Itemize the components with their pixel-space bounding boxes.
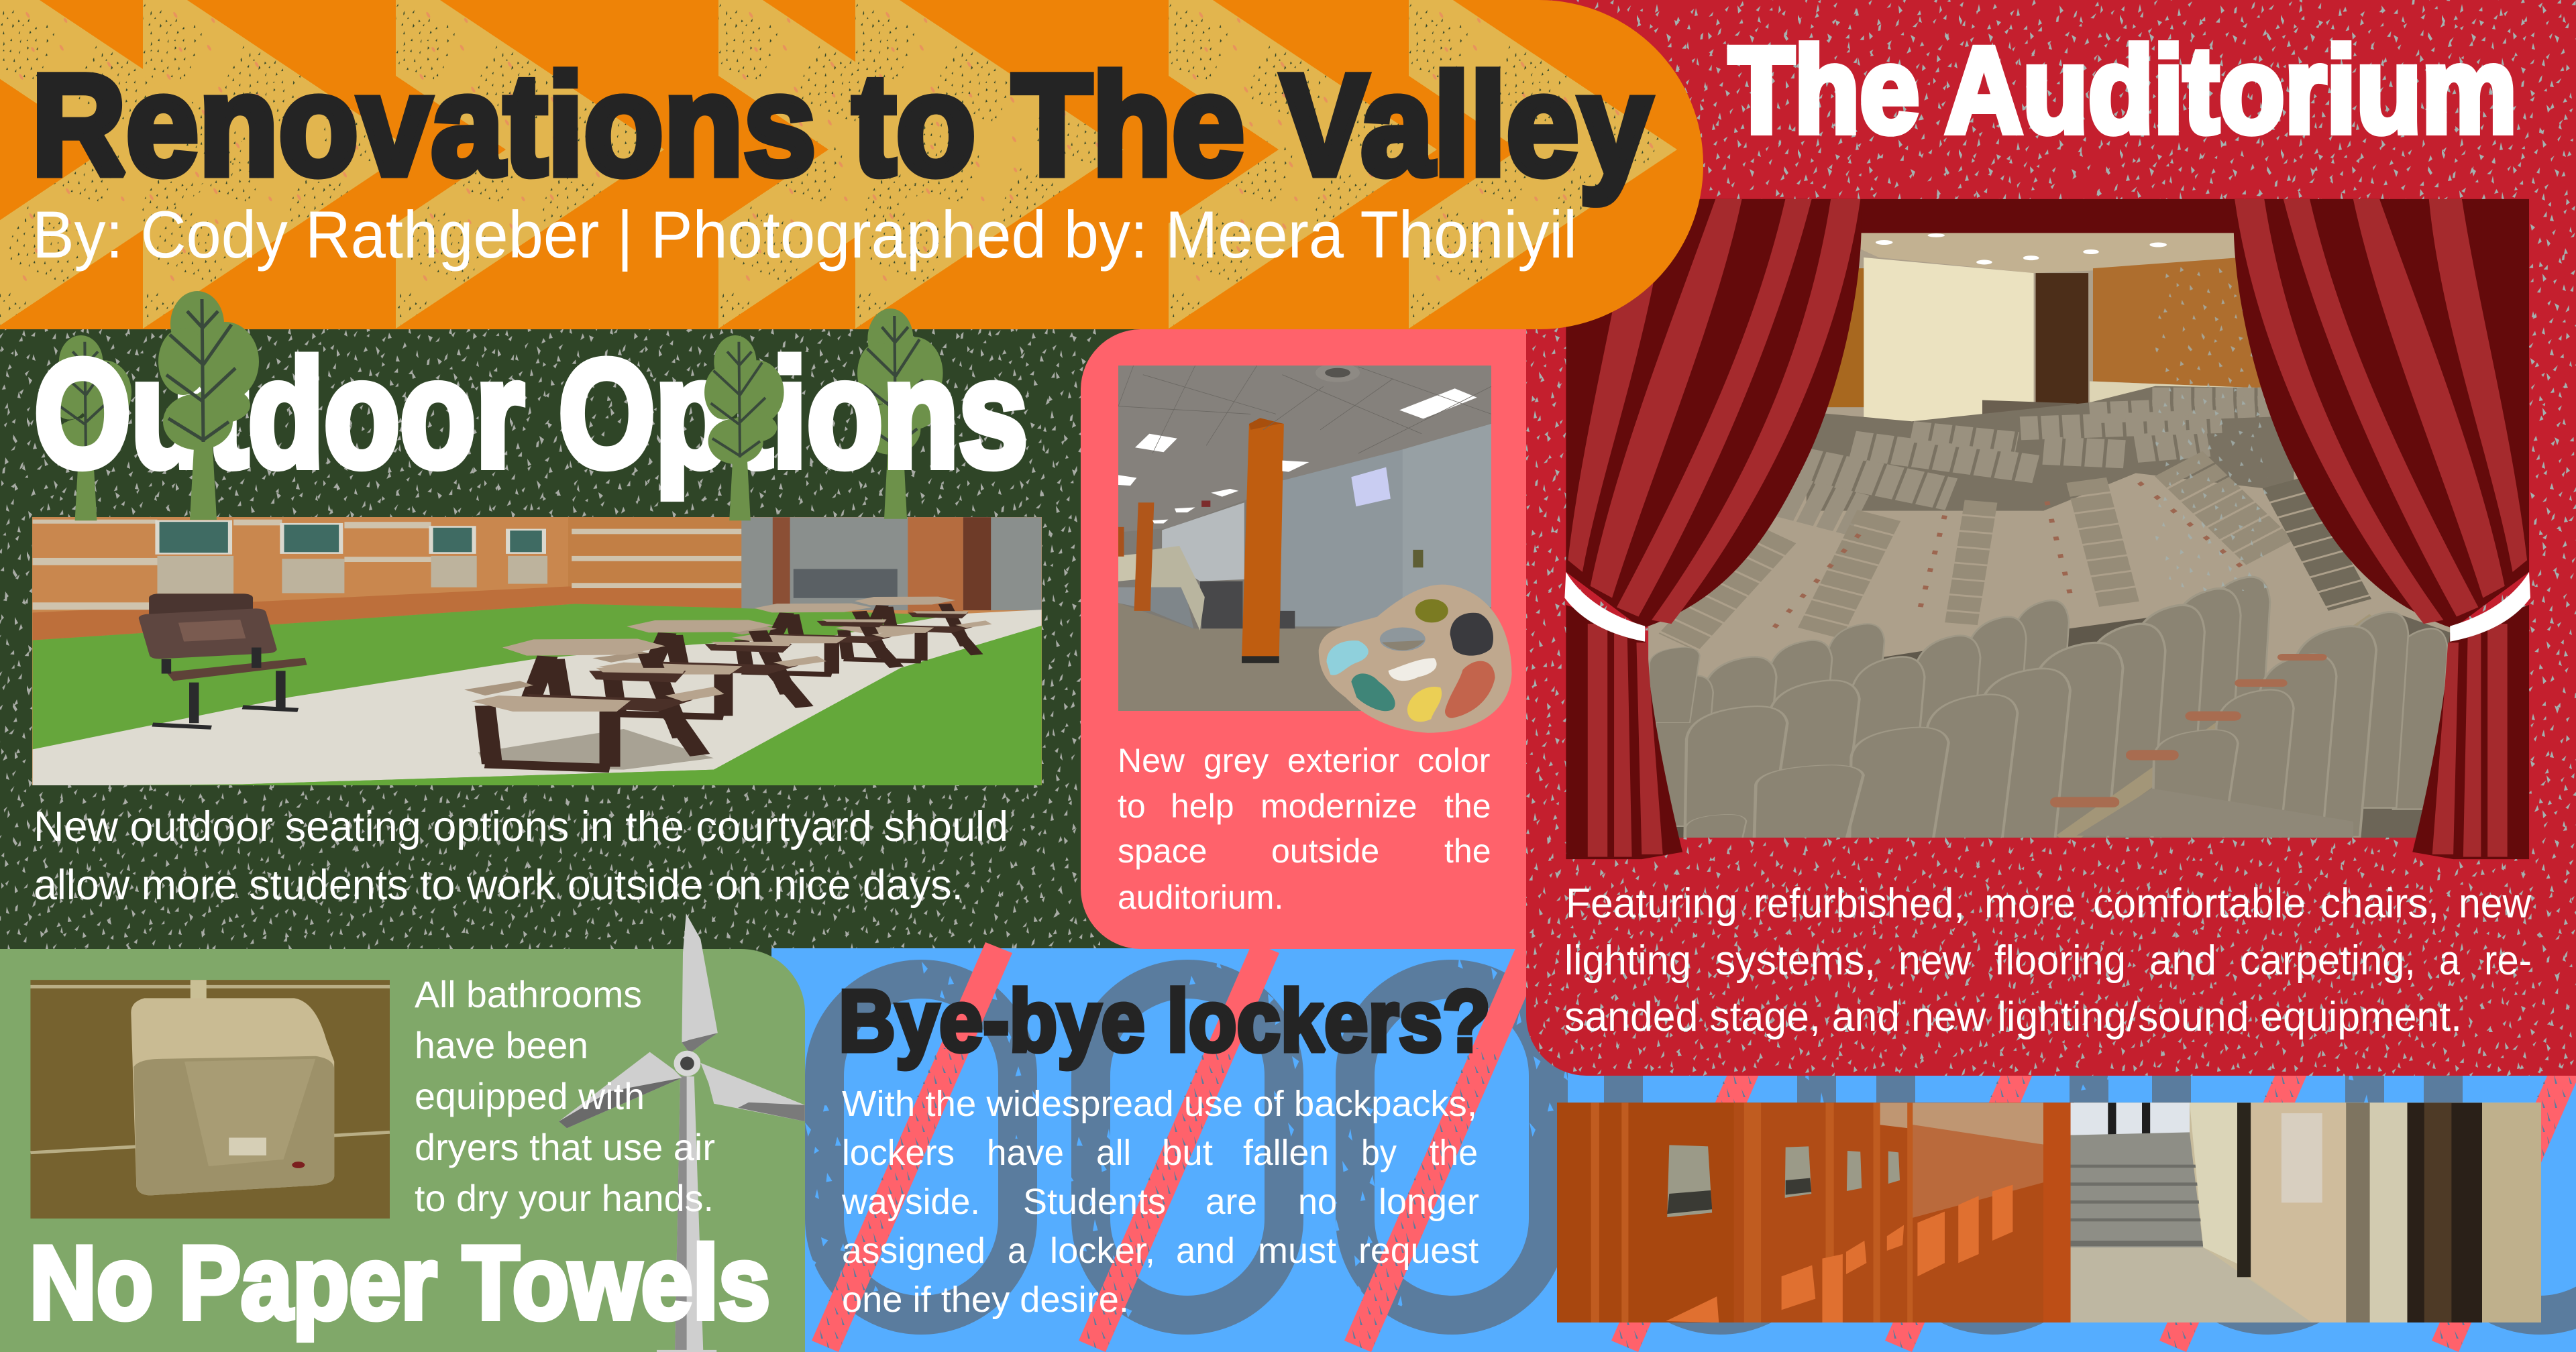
photo: renovated auditorium seats bbox=[1648, 231, 2465, 875]
heading: Bye-bye lockers?: Bye-bye lockers? bbox=[839, 972, 1491, 1070]
text: grey exterior description: the bbox=[1444, 832, 1491, 870]
text: lockers description: With the widespread use of backpacks, bbox=[842, 1084, 1477, 1124]
text: lockers description: the bbox=[1430, 1133, 1478, 1173]
text: auditorium description: chairs, bbox=[2320, 881, 2439, 927]
icon: back tree right bbox=[857, 308, 943, 519]
text: auditorium description: systems, bbox=[1715, 938, 1876, 984]
panel: coral corridor background bbox=[1081, 329, 1527, 949]
text: auditorium description: re- bbox=[2484, 938, 2532, 984]
subtitle: byline: By: Cody Rathgeber | Photographed by: Meera Thoniyil bbox=[32, 197, 1577, 272]
text: auditorium description: Featuring bbox=[1566, 881, 1737, 927]
text: grey exterior description bbox=[1118, 742, 1491, 916]
panel: no paper towels background bbox=[0, 949, 805, 1352]
text: grey exterior description: to bbox=[1118, 787, 1146, 825]
text: auditorium description bbox=[1564, 881, 2532, 1040]
decoration: steel loop shapes bbox=[824, 979, 2576, 1315]
icon: front tree left bbox=[158, 291, 259, 520]
text: grey exterior description: New bbox=[1118, 742, 1185, 779]
text: bathrooms description: equipped with bbox=[415, 1075, 645, 1117]
text: auditorium description: new bbox=[2459, 881, 2531, 927]
text: grey exterior description: the bbox=[1444, 787, 1491, 825]
text: lockers description: lockers bbox=[842, 1133, 955, 1173]
text: auditorium description: refurbished, bbox=[1754, 881, 1965, 927]
text: courtyard description: allow more students to work outside on nice days. bbox=[34, 862, 963, 909]
text: bathrooms description: dryers that use air bbox=[415, 1126, 715, 1168]
text: lockers description: Students bbox=[1023, 1182, 1166, 1222]
text: lockers description: one if they desire. bbox=[842, 1280, 1129, 1320]
icon: back tree left bbox=[49, 335, 131, 520]
title: Renovations to The Valley: Renovations to The Valley bbox=[32, 45, 1652, 205]
text: auditorium description: sanded stage, and new lighting/sound equipment. bbox=[1564, 994, 2462, 1040]
text: auditorium description: flooring bbox=[1994, 938, 2126, 984]
text: lockers description: request bbox=[1358, 1231, 1479, 1271]
text: lockers description bbox=[841, 1084, 1479, 1320]
text: lockers description: are bbox=[1205, 1182, 1257, 1222]
heading: No Paper Towels: No Paper Towels bbox=[30, 1225, 770, 1341]
text: grey exterior description: help bbox=[1171, 787, 1234, 825]
text: auditorium description: and bbox=[2149, 938, 2216, 984]
photo: hand dryer bbox=[30, 980, 390, 1219]
text: lockers description: wayside. bbox=[841, 1182, 980, 1222]
text: grey exterior description: color bbox=[1417, 742, 1490, 779]
icon: stage curtains bbox=[1564, 199, 2530, 859]
heading: Outdoor Options: Outdoor Options bbox=[34, 329, 1028, 499]
text: auditorium description: carpeting, bbox=[2240, 938, 2416, 984]
photo: hallway outside the auditorium bbox=[1118, 363, 1492, 712]
photo: courtyard seating bbox=[28, 514, 1053, 790]
text: lockers description: by bbox=[1361, 1133, 1397, 1173]
text: courtyard description: New outdoor seating options in the courtyard should bbox=[34, 803, 1008, 850]
text: grey exterior description: exterior bbox=[1287, 742, 1399, 779]
text: bathrooms description: to dry your hands. bbox=[415, 1177, 714, 1219]
photo: lockers hallway bbox=[1550, 1101, 2550, 1325]
text: grey exterior description: space bbox=[1118, 832, 1207, 870]
text: grey exterior description: modernize bbox=[1260, 787, 1417, 825]
text: grey exterior description: outside bbox=[1271, 832, 1379, 870]
text: bathrooms description: All bathrooms bbox=[415, 973, 642, 1015]
text: lockers description: a bbox=[1008, 1231, 1027, 1271]
icon: paint palette bbox=[1319, 585, 1512, 733]
text: grey exterior description: grey bbox=[1203, 742, 1269, 779]
text: auditorium description: lighting bbox=[1564, 938, 1691, 984]
text: bathrooms description bbox=[415, 973, 715, 1219]
panel: header banner bbox=[0, 0, 1704, 329]
text: lockers description: and bbox=[1176, 1231, 1235, 1271]
panel: outdoor options background bbox=[0, 329, 1100, 953]
text: bathrooms description: have been bbox=[415, 1024, 588, 1066]
text: auditorium description: more bbox=[1984, 881, 2076, 927]
text: auditorium description: comfortable bbox=[2093, 881, 2306, 927]
panel: blue lockers background bbox=[771, 948, 2576, 1352]
text: lockers description: fallen bbox=[1243, 1133, 1329, 1173]
text: lockers description: must bbox=[1258, 1231, 1336, 1271]
icon: wind turbine bbox=[559, 913, 805, 1352]
text: auditorium description: a bbox=[2439, 938, 2460, 984]
text: auditorium description: new bbox=[1898, 938, 1971, 984]
icon: front tree right bbox=[704, 335, 784, 520]
text: grey exterior description: auditorium. bbox=[1118, 879, 1283, 916]
text: lockers description: no bbox=[1298, 1182, 1337, 1222]
text: lockers description: all bbox=[1096, 1133, 1131, 1173]
decoration: coral diagonal slashes bbox=[812, 942, 2576, 1352]
text: lockers description: longer bbox=[1379, 1182, 1479, 1222]
panel: auditorium background bbox=[1526, 0, 2576, 1076]
text: lockers description: assigned bbox=[842, 1231, 985, 1271]
text: lockers description: locker, bbox=[1050, 1231, 1155, 1271]
text: courtyard description bbox=[34, 803, 1008, 909]
text: lockers description: have bbox=[987, 1133, 1064, 1173]
text: lockers description: but bbox=[1162, 1133, 1213, 1173]
